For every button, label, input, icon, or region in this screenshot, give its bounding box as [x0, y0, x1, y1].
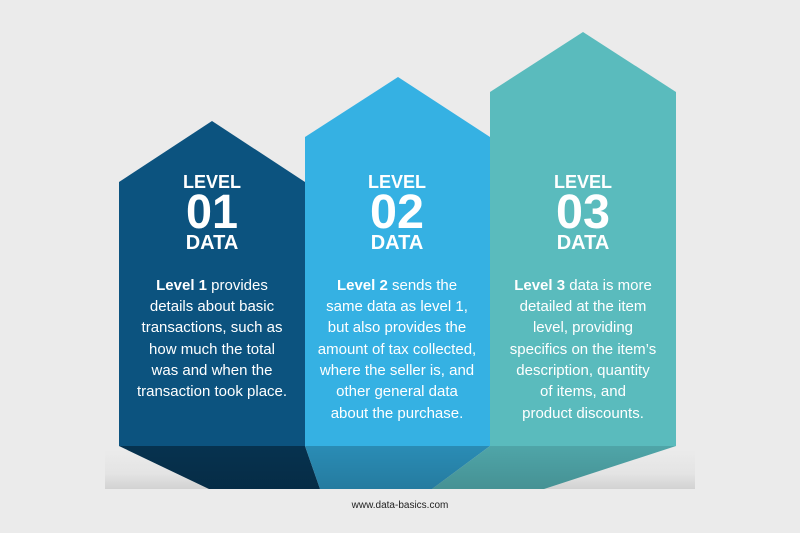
panel 2: level 02 — [305, 77, 490, 489]
body text 2: about the purchase. — [331, 405, 463, 422]
heading 2: DATA — [371, 232, 423, 254]
body text 2: Level 2 sends the — [337, 277, 457, 294]
heading 1 — [183, 172, 241, 254]
heading 2 — [368, 172, 426, 254]
heading 1: LEVEL — [183, 172, 241, 192]
panel 1: level 01 — [119, 121, 320, 489]
body text 3: level, providing — [533, 319, 633, 336]
heading 2: LEVEL — [368, 172, 426, 192]
body text 3: of items, and — [540, 383, 626, 400]
heading 3: LEVEL — [554, 172, 612, 192]
body text 3: specifics on the item’s — [510, 341, 656, 358]
body text 1: transaction took place. — [137, 383, 287, 400]
heading 1: DATA — [186, 232, 238, 254]
heading 3: 03 — [556, 186, 610, 239]
body text 2: amount of tax collected, — [318, 341, 476, 358]
body text 2: but also provides the — [328, 319, 466, 336]
panel 3: level 03 — [432, 32, 676, 489]
body text 1: transactions, such as — [142, 319, 282, 336]
body text 3: detailed at the item — [520, 298, 646, 315]
body text 3 — [510, 277, 656, 422]
floor shadow — [105, 450, 695, 489]
heading 3: DATA — [557, 232, 609, 254]
footer url: www.data-basics.com — [351, 500, 448, 511]
base 1 — [119, 446, 320, 489]
body text 2: where the seller is, and — [319, 362, 474, 379]
base 3 — [432, 446, 676, 489]
body text 3: Level 3 data is more — [514, 277, 652, 294]
body text 1 — [137, 277, 287, 400]
body text 1: was and when the — [151, 362, 272, 379]
body text 2 — [318, 277, 476, 422]
body text 3: product discounts. — [522, 405, 644, 422]
heading 3 — [554, 172, 612, 254]
body text 1: Level 1 provides — [156, 277, 268, 294]
base 2 — [305, 446, 490, 489]
heading 2: 02 — [370, 186, 424, 239]
body text 3: description, quantity — [516, 362, 650, 379]
body text 2: same data as level 1, — [326, 298, 468, 315]
body text 2: other general data — [336, 383, 459, 400]
body text 1: details about basic — [150, 298, 275, 315]
body text 1: how much the total — [149, 341, 275, 358]
base shading — [119, 446, 676, 489]
heading 1: 01 — [186, 186, 238, 239]
